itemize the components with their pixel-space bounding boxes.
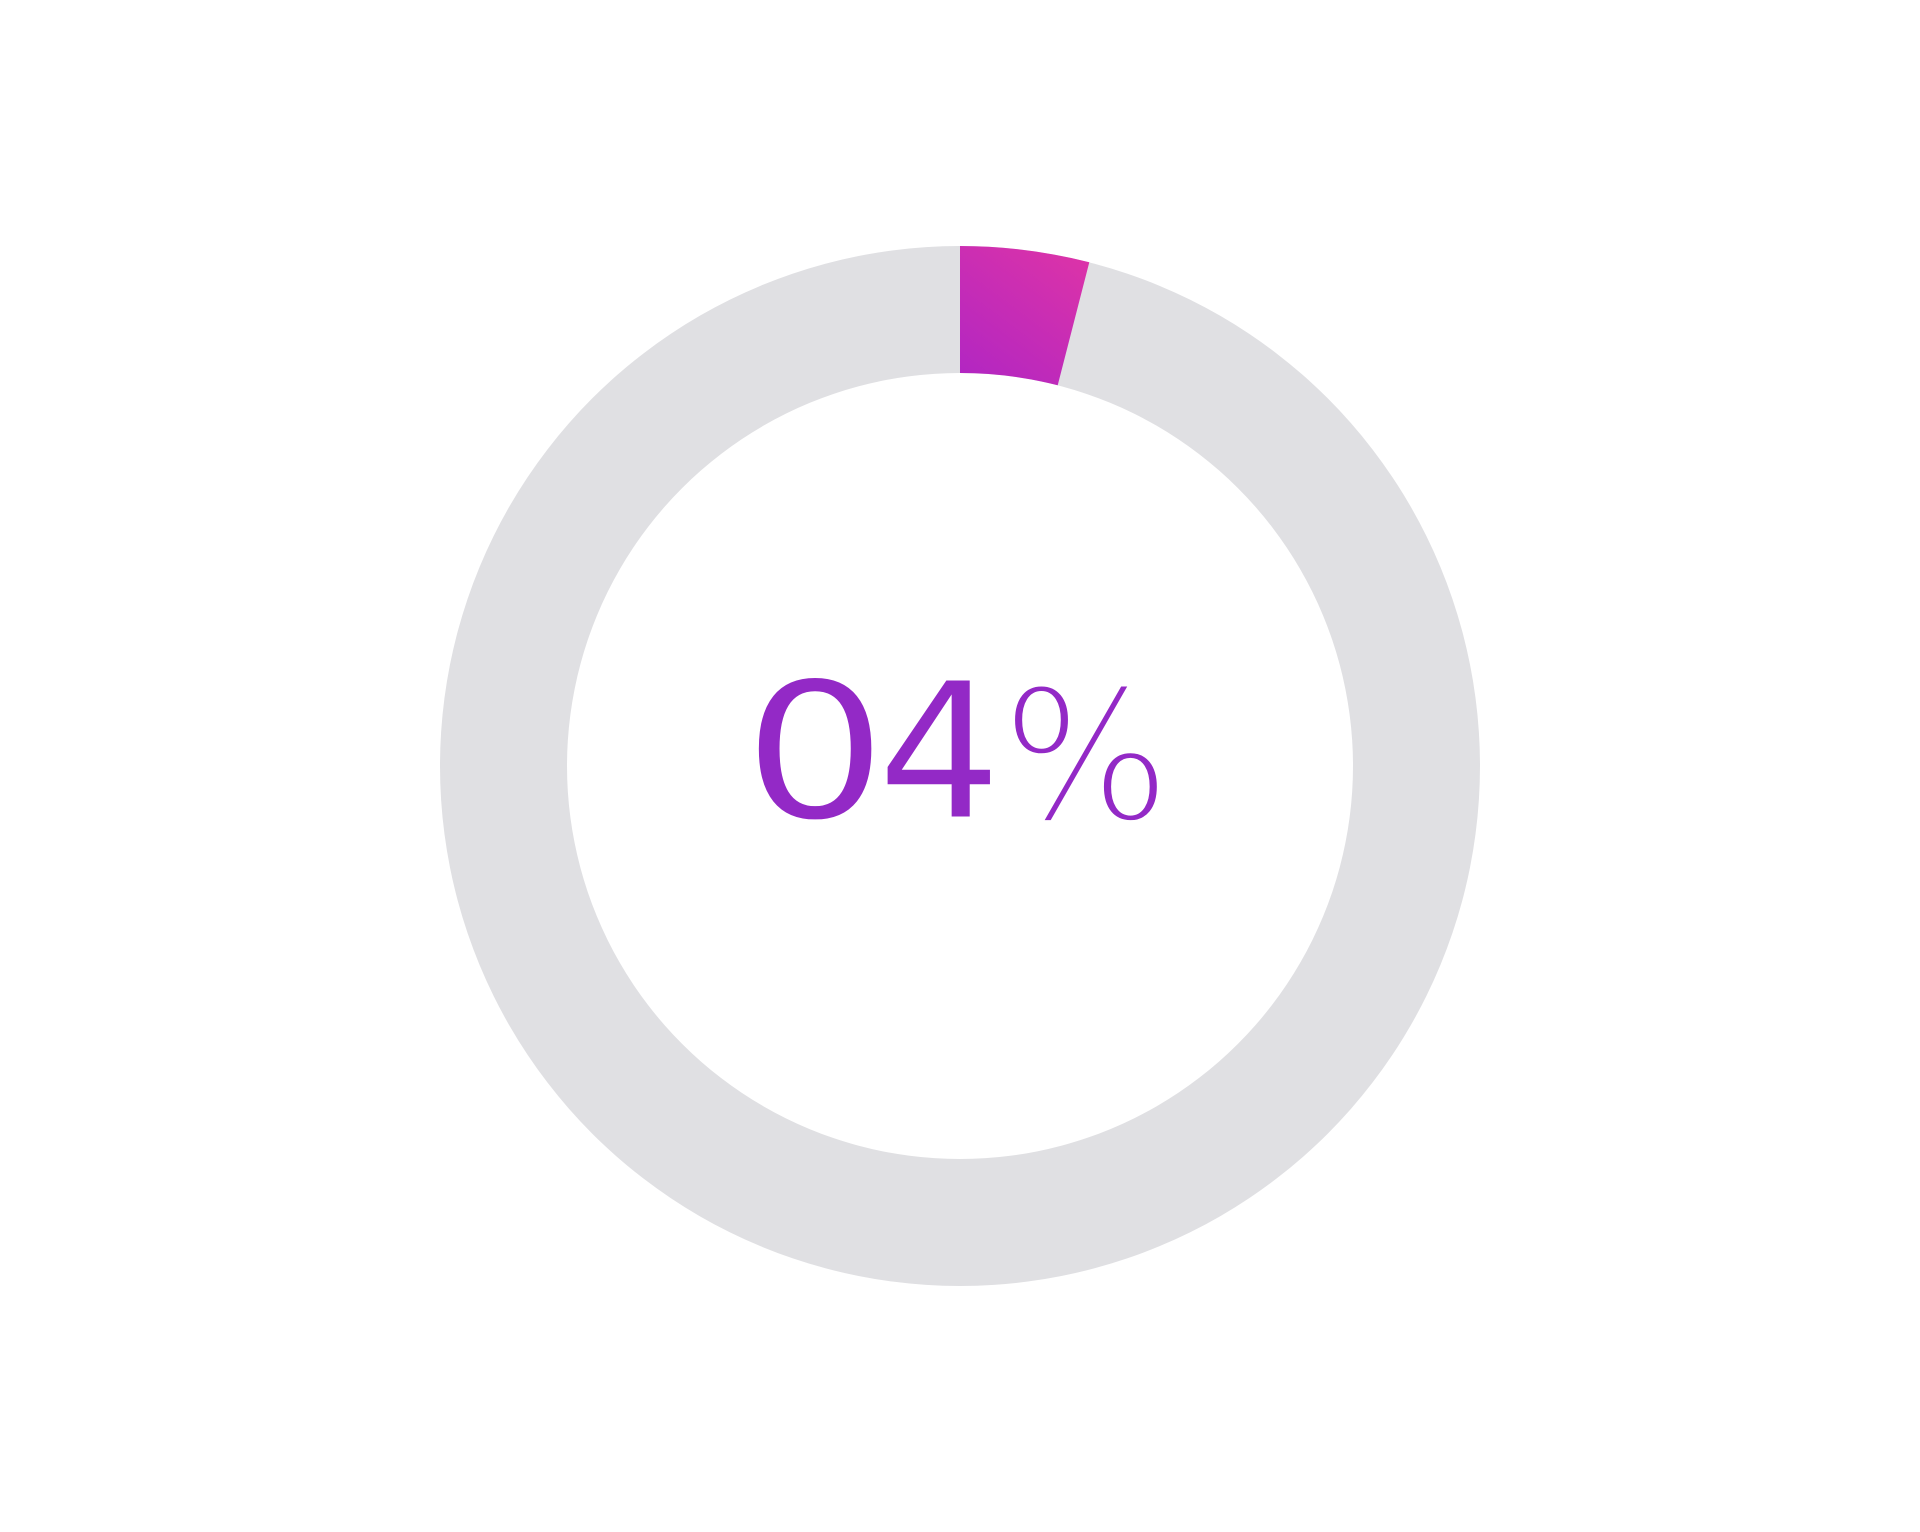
digit 0: 0	[743, 643, 887, 863]
chart track: remaining 96 percent	[440, 246, 1480, 1286]
value label: 04%	[743, 643, 1170, 865]
percent sign: %	[1002, 649, 1170, 865]
digit 4: 4	[878, 643, 1001, 862]
chart segment: 4 percent	[960, 246, 1089, 385]
